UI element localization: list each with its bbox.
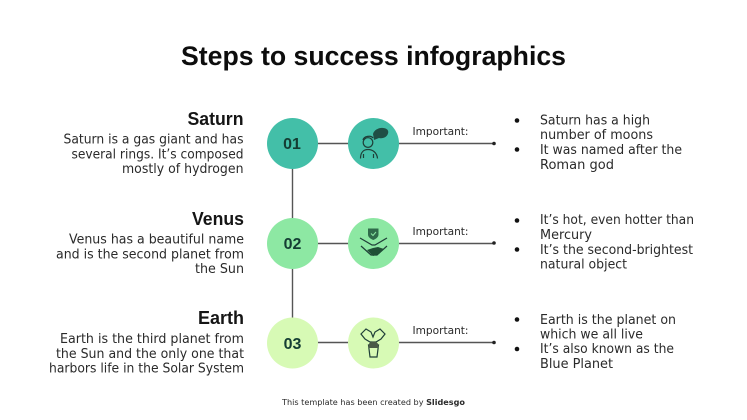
text block: Saturn description: mostly of hydrogen	[122, 162, 244, 177]
text block: Earth bullets: Blue Planet	[540, 357, 613, 372]
panel: Saturn text	[64, 109, 244, 177]
text block: Earth description: harbors life in the Solar System	[49, 362, 244, 376]
step 03 row	[267, 318, 496, 368]
icon: three-way teamwork	[348, 318, 399, 368]
text block: Saturn bullets: Roman god	[540, 158, 614, 173]
heading: Saturn: Saturn	[188, 109, 244, 129]
number circle 01	[267, 118, 318, 169]
text block: Venus bullets: It’s hot, even hotter than	[540, 213, 694, 228]
text block: Earth bullets: Earth is the planet on	[540, 313, 676, 328]
connector line 03	[317, 342, 494, 344]
footer credit: This template has been created by Slidesgo	[281, 398, 466, 407]
text block: Earth bullets: which we all live	[540, 328, 643, 342]
arrow end dot 02	[492, 241, 496, 245]
step 02 row	[267, 218, 496, 269]
text block: Venus description	[56, 232, 244, 277]
icon: person thinking	[348, 118, 399, 169]
text block: Saturn description: several rings. It’s composed	[72, 148, 244, 162]
step 01 row	[267, 118, 496, 169]
heading: Venus: Venus	[192, 209, 244, 229]
connector line 02	[317, 242, 494, 244]
text block: Earth description	[49, 332, 244, 376]
text block: Saturn bullets	[515, 114, 682, 173]
connector line 01	[317, 142, 494, 144]
number circle 03	[267, 318, 318, 368]
text block: Saturn bullets: Saturn has a high	[540, 114, 650, 128]
text block: Venus bullets: natural object	[540, 258, 627, 272]
number circle 01: 01	[283, 136, 301, 153]
title: Steps to success infographics	[181, 41, 566, 71]
label: Important 03: Important:	[412, 325, 468, 337]
text block: Saturn description	[64, 132, 244, 177]
label: Important 02: Important:	[412, 226, 468, 238]
text block: Venus bullets	[515, 213, 694, 272]
panel: Venus text	[56, 209, 244, 277]
text block: Saturn description: Saturn is a gas giant and has	[64, 132, 244, 148]
text block: Saturn bullets: It was named after the	[540, 143, 682, 158]
arrow end dot 01	[492, 142, 496, 145]
number circle 03: 03	[284, 336, 302, 353]
text block: Earth bullets	[515, 313, 676, 372]
number circle 02: 02	[284, 236, 302, 253]
text block: Venus description: Venus has a beautiful name	[69, 232, 244, 248]
heading: Earth: Earth	[198, 308, 244, 328]
arrow end dot 03	[492, 341, 496, 344]
text block: Venus bullets: It’s the second-brightest	[540, 243, 693, 258]
vertical connector	[292, 165, 294, 322]
text block: Earth bullets: It’s also known as the	[540, 342, 674, 357]
text block: Venus bullets: Mercury	[540, 228, 592, 243]
text block: Earth description: Earth is the third planet from	[60, 332, 244, 347]
panel: Earth text	[49, 308, 244, 376]
label: Important 01: Important:	[412, 126, 468, 138]
text block: Earth description: the Sun and the only one that	[56, 347, 244, 362]
number circle 02	[267, 218, 318, 269]
icon: shield and handshake	[348, 218, 399, 269]
text block: Saturn bullets: number of moons	[540, 128, 653, 143]
text block: Venus description: the Sun	[195, 262, 244, 277]
text block: Venus description: and is the second planet from	[56, 248, 244, 262]
